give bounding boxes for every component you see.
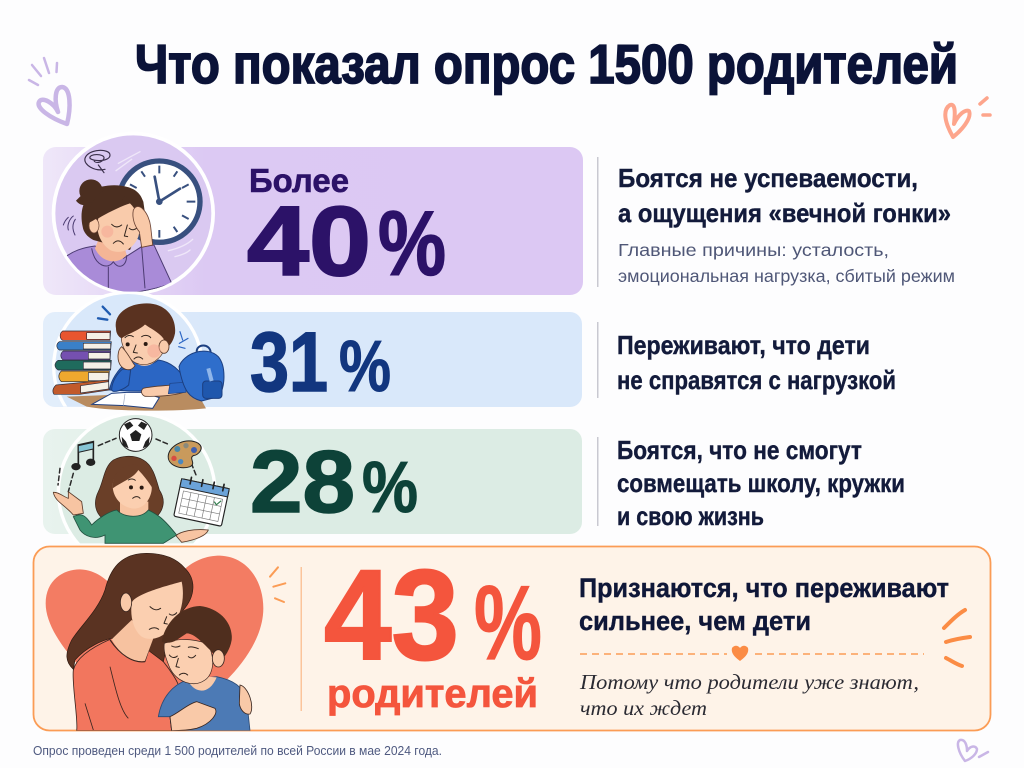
text block: parents worry more <box>579 573 949 636</box>
text block: workload <box>617 330 896 395</box>
girl hair <box>95 456 163 518</box>
boy body <box>158 677 250 731</box>
mother hand <box>170 702 216 731</box>
text block: fear of the race <box>618 163 955 286</box>
statistic: 43 percent <box>324 544 542 687</box>
panel background <box>43 147 583 295</box>
panel: 43 percent <box>34 544 990 731</box>
boy face <box>164 639 213 684</box>
illustration: girl juggling activities <box>52 415 230 544</box>
illustration: tired woman and clock <box>52 132 215 295</box>
hair back <box>82 185 145 250</box>
statistic: 31 percent: % <box>339 327 391 407</box>
text block: italic note: что их ждет <box>580 696 707 720</box>
panel: 31 percent <box>43 292 895 411</box>
text block: italic note: Потому что родители уже знают, <box>579 670 919 694</box>
mother neck <box>112 620 153 661</box>
statistic: 40 percent: % <box>378 193 446 295</box>
panel background <box>43 429 582 534</box>
text block: parents worry more: Признаются, что переживают <box>579 573 949 603</box>
sweater <box>60 245 172 294</box>
icon: purple heart with rays <box>29 58 70 124</box>
panel background <box>34 546 990 730</box>
mother hair <box>67 553 193 669</box>
statistic: 28 percent <box>250 432 418 531</box>
statistic: 28 percent: % <box>362 448 418 528</box>
boy hair <box>162 606 232 662</box>
statistic: 40 percent <box>247 186 446 296</box>
label: Более: Более <box>249 162 349 199</box>
statistic: 40 percent: 40 <box>247 186 371 296</box>
statistic: 31 percent: 31 <box>250 315 328 409</box>
text block: fear of the race: Главные причины: усталость, <box>618 240 889 260</box>
open book <box>92 392 159 408</box>
face <box>121 324 165 365</box>
illustration: mother hugging son <box>46 553 285 731</box>
hair <box>116 303 175 348</box>
text block: workload: Переживают, что дети <box>617 330 870 360</box>
text block: combining school: Боятся, что не смогут <box>617 435 862 465</box>
icon: orange heart with rays <box>945 98 990 137</box>
illustration: boy with books <box>52 292 224 411</box>
shirt <box>110 360 186 392</box>
music note <box>71 442 95 470</box>
panel: 28 percent <box>43 415 904 544</box>
statistic: 31 percent <box>250 315 391 409</box>
icon: orange rays right <box>944 610 970 666</box>
icon: small purple heart <box>958 740 988 761</box>
text block: fear of the race: Боятся не успеваемости, <box>618 163 918 193</box>
text block: fear of the race: а ощущения «вечной гонки» <box>618 198 951 228</box>
backpack <box>179 345 224 401</box>
text block: fear of the race: эмоциональная нагрузка, сбитый режим <box>618 266 955 286</box>
heart <box>46 556 264 684</box>
mother sweater <box>73 639 178 731</box>
raised hand <box>133 207 153 247</box>
text block: combining school: совмещать школу, кружки <box>617 468 905 498</box>
text block: combining school: и свою жизнь <box>617 501 764 531</box>
text block: parents worry more: сильнее, чем дети <box>579 606 811 636</box>
text block: workload: не справятся с нагрузкой <box>617 365 896 395</box>
divider with heart <box>580 646 924 661</box>
text block: combining school <box>617 435 905 531</box>
mother face <box>131 582 183 639</box>
arm and hand on cheek <box>112 369 131 391</box>
statistic: 28 percent: 28 <box>250 432 355 531</box>
panel background <box>43 312 582 407</box>
statistic: 43 percent: % <box>474 564 542 682</box>
panel: 40 percent <box>43 132 955 296</box>
footer note: Опрос проведен среди 1 500 родителей по всей России в мае 2024 года. <box>33 743 442 758</box>
statistic: 43 percent: 43 <box>324 544 459 687</box>
text block: italic note <box>579 670 919 720</box>
label: родителей: родителей <box>327 672 538 716</box>
